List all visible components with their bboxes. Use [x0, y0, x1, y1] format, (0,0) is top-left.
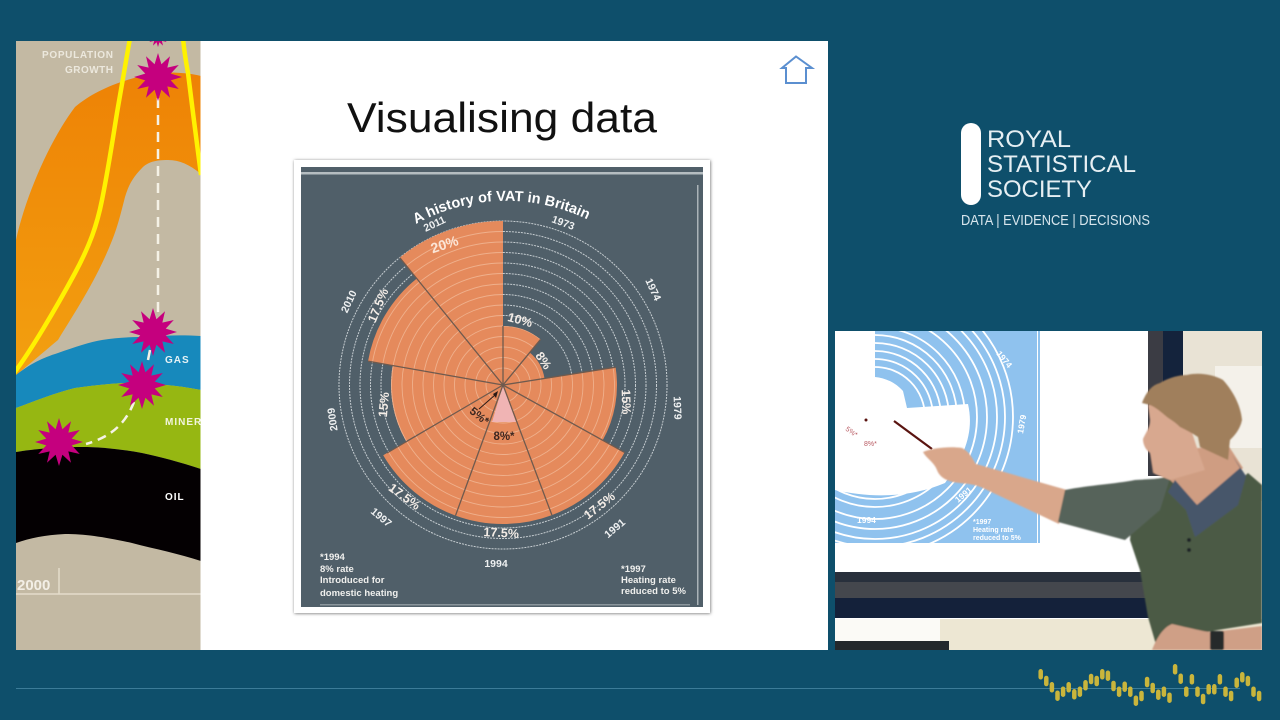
orange band	[16, 73, 201, 375]
chart title: A history of VAT in Britain	[414, 190, 589, 224]
pencil	[894, 421, 932, 449]
logo: Royal Statistical Society: DATA | EVIDENCE | DECISIONS	[961, 213, 1150, 229]
rate labels: 8%	[532, 349, 554, 372]
footnote 1994: Introduced for	[320, 575, 385, 586]
projected chart: 5%*	[844, 426, 859, 439]
shirt collar	[1168, 455, 1246, 537]
panel: energy and population illustration	[14, 27, 202, 650]
wall	[1183, 331, 1262, 501]
year labels: 1994	[484, 558, 508, 570]
blue band	[16, 335, 201, 408]
hair	[1142, 374, 1242, 460]
year labels: 1973	[550, 214, 576, 233]
footnote 1994: domestic heating	[320, 588, 398, 599]
year labels: 1997	[368, 506, 394, 530]
face	[1143, 404, 1205, 480]
rate labels: 10%	[506, 310, 534, 330]
heating labels	[467, 405, 515, 443]
footnote 1997: Heating rate	[621, 575, 676, 586]
data wave decoration	[1041, 666, 1259, 704]
icon: home	[782, 56, 812, 83]
neck	[1150, 445, 1243, 505]
icon: starbursts	[35, 27, 182, 466]
rate labels: 17.5%	[365, 286, 391, 325]
projected labels: 1979	[1015, 414, 1028, 434]
projected chart	[835, 331, 1040, 543]
year labels: 1974	[642, 277, 663, 303]
arrow	[479, 391, 498, 409]
label: population growth	[42, 51, 112, 73]
projected labels: reduced to 5%	[973, 535, 1022, 542]
footnote 1997: *1997	[621, 564, 646, 575]
screen bezel	[835, 331, 1183, 618]
wall below screen	[940, 619, 1262, 650]
projected labels: 1994	[857, 515, 876, 525]
label: population growth: POPULATION	[42, 50, 113, 61]
sweater body	[1130, 473, 1262, 648]
footnote 1994: 8% rate	[320, 564, 354, 575]
rate labels: 15%	[619, 389, 633, 415]
year labels: 1991	[602, 516, 628, 541]
projected chart: 8%*	[864, 441, 877, 448]
dashed path	[86, 98, 158, 444]
year labels: 2011	[422, 214, 448, 235]
heating labels: 5%*	[467, 405, 491, 428]
rate labels: 17.5%	[483, 525, 519, 541]
panel: VAT polar chart	[292, 158, 713, 616]
footnote 1994	[320, 552, 398, 599]
rate labels: 17.5%	[386, 481, 423, 513]
black band	[16, 447, 201, 561]
logo: Royal Statistical Society	[961, 123, 1150, 229]
rate labels: 20%	[429, 232, 461, 256]
spokes	[368, 258, 625, 516]
projected labels: 1974	[994, 349, 1014, 370]
title: Visualising data	[347, 94, 658, 141]
projected labels	[857, 349, 1028, 542]
label: gas: GAS	[165, 355, 190, 366]
green band	[16, 383, 201, 469]
rings on sectors	[372, 231, 619, 518]
rate labels	[365, 232, 633, 541]
panel: speaker video	[835, 331, 1262, 650]
year labels: 1979	[671, 396, 683, 420]
rate labels: 17.5%	[581, 489, 618, 522]
buttons	[1187, 538, 1191, 552]
arm and fist	[923, 447, 1067, 524]
panel: slide	[16, 41, 828, 650]
logo: Royal Statistical Society: STATISTICAL	[987, 151, 1136, 178]
rate labels: 15%	[376, 392, 392, 418]
label: oil: OIL	[165, 492, 185, 503]
label: population growth: GROWTH	[65, 65, 113, 76]
axis year 2000: 2000	[17, 577, 50, 594]
lower hand	[1152, 624, 1262, 650]
footer line	[16, 688, 1240, 690]
projected labels: *1997	[973, 519, 991, 526]
watch	[1210, 631, 1224, 650]
logo: Royal Statistical Society: SOCIETY	[987, 176, 1092, 203]
heating labels: 8%*	[493, 431, 515, 443]
yellow curves	[14, 38, 201, 373]
pink heating wedge	[492, 385, 516, 422]
year labels	[325, 214, 683, 570]
footnote 1997: reduced to 5%	[621, 586, 686, 597]
footnote 1994: *1994	[320, 552, 346, 563]
label: mineral: MINER	[165, 417, 202, 428]
year labels: 2010	[339, 288, 360, 315]
projected labels: 1991	[953, 485, 974, 505]
logo: Royal Statistical Society: ROYAL	[987, 126, 1071, 153]
projected labels: Heating rate	[973, 527, 1014, 534]
sectors	[368, 221, 625, 524]
speaker	[923, 374, 1262, 650]
sleeve	[1058, 478, 1170, 540]
year labels: 2009	[325, 407, 341, 432]
footnote 1997	[621, 564, 686, 597]
dotted rings	[339, 221, 667, 549]
